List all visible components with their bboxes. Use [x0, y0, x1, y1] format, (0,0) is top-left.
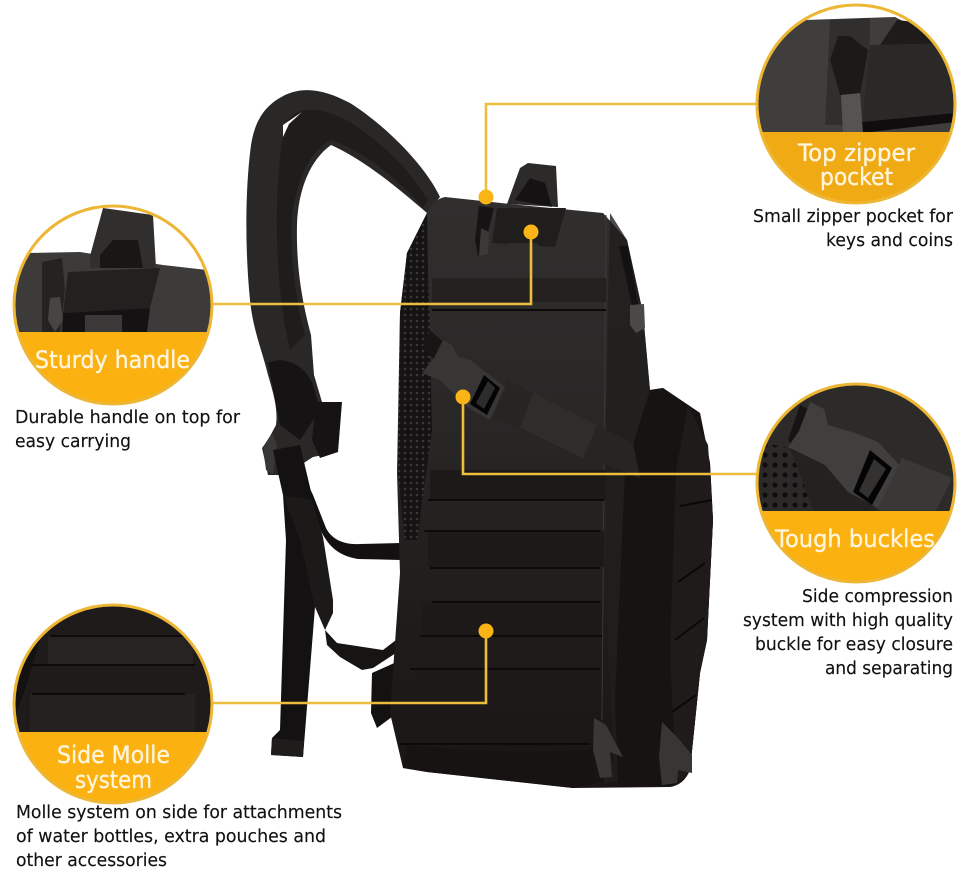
heading: tough buckles: Tough buckles: [774, 525, 935, 553]
thumbnail: buckle close-up: [758, 386, 954, 511]
side flap: [371, 655, 415, 728]
text: side molle description: other accessories: [16, 850, 167, 871]
bottom zipper pulls: [593, 718, 623, 778]
side zipper: [619, 246, 638, 306]
text: tough buckles description: system with high quality: [743, 610, 953, 631]
top zipper: [475, 206, 494, 256]
caption band: [20, 732, 206, 802]
text: tough buckles description: Side compression: [802, 586, 953, 607]
text: side molle description: of water bottles, extra pouches and: [16, 826, 326, 847]
text: side molle description: [16, 802, 342, 871]
panel: top zipper pocket: pocket: [820, 163, 893, 191]
leader line: sturdy handle: [212, 224, 538, 304]
heading: top zipper pocket: Top zipper: [797, 139, 915, 167]
leader line: top zipper pocket: [478, 104, 756, 204]
text: tough buckles description: buckle for easy closure: [755, 634, 953, 655]
panel: side molle system: system: [75, 766, 152, 794]
panel: side molle system: [10, 600, 216, 803]
text: sturdy handle description: [15, 407, 241, 452]
handle flap and pull: [492, 208, 566, 247]
mesh panel: [398, 213, 432, 540]
thumbnail: molle close-up: [16, 606, 210, 732]
panel: tough buckles: [750, 380, 960, 582]
thumbnail: handle close-up: [16, 208, 210, 332]
text: tough buckles description: [743, 586, 953, 679]
leader line: tough buckles: [456, 390, 756, 474]
text: sturdy handle description: easy carrying: [15, 431, 131, 452]
caption band: [762, 132, 950, 202]
compression strap: [422, 330, 447, 365]
leader line: side molle: [212, 624, 494, 703]
heading: sturdy handle: Sturdy handle: [35, 346, 190, 374]
heading: side molle system: Side Molle: [57, 741, 170, 769]
text: top zipper description: Small zipper pocket for: [753, 206, 954, 227]
text: tough buckles description: and separating: [825, 658, 953, 679]
panel: top zipper pocket: [750, 0, 960, 203]
panel: sturdy handle: [10, 200, 216, 404]
backpack illustration: [246, 90, 713, 788]
thumbnail: zipper close-up: [758, 17, 954, 132]
caption band: [762, 511, 950, 580]
pack body: [390, 197, 713, 788]
text: sturdy handle description: Durable handle on top for: [15, 407, 241, 428]
molle webbing: [414, 278, 606, 702]
top handle: [507, 163, 558, 207]
text: top zipper description: keys and coins: [826, 230, 953, 251]
text: top zipper description: [753, 206, 954, 251]
caption band: [19, 332, 207, 402]
shoulder strap: [246, 90, 440, 475]
base seam: [403, 742, 606, 788]
text: side molle description: Molle system on side for attachments: [16, 802, 342, 823]
lower straps: [271, 445, 315, 757]
buckle: [422, 340, 505, 420]
